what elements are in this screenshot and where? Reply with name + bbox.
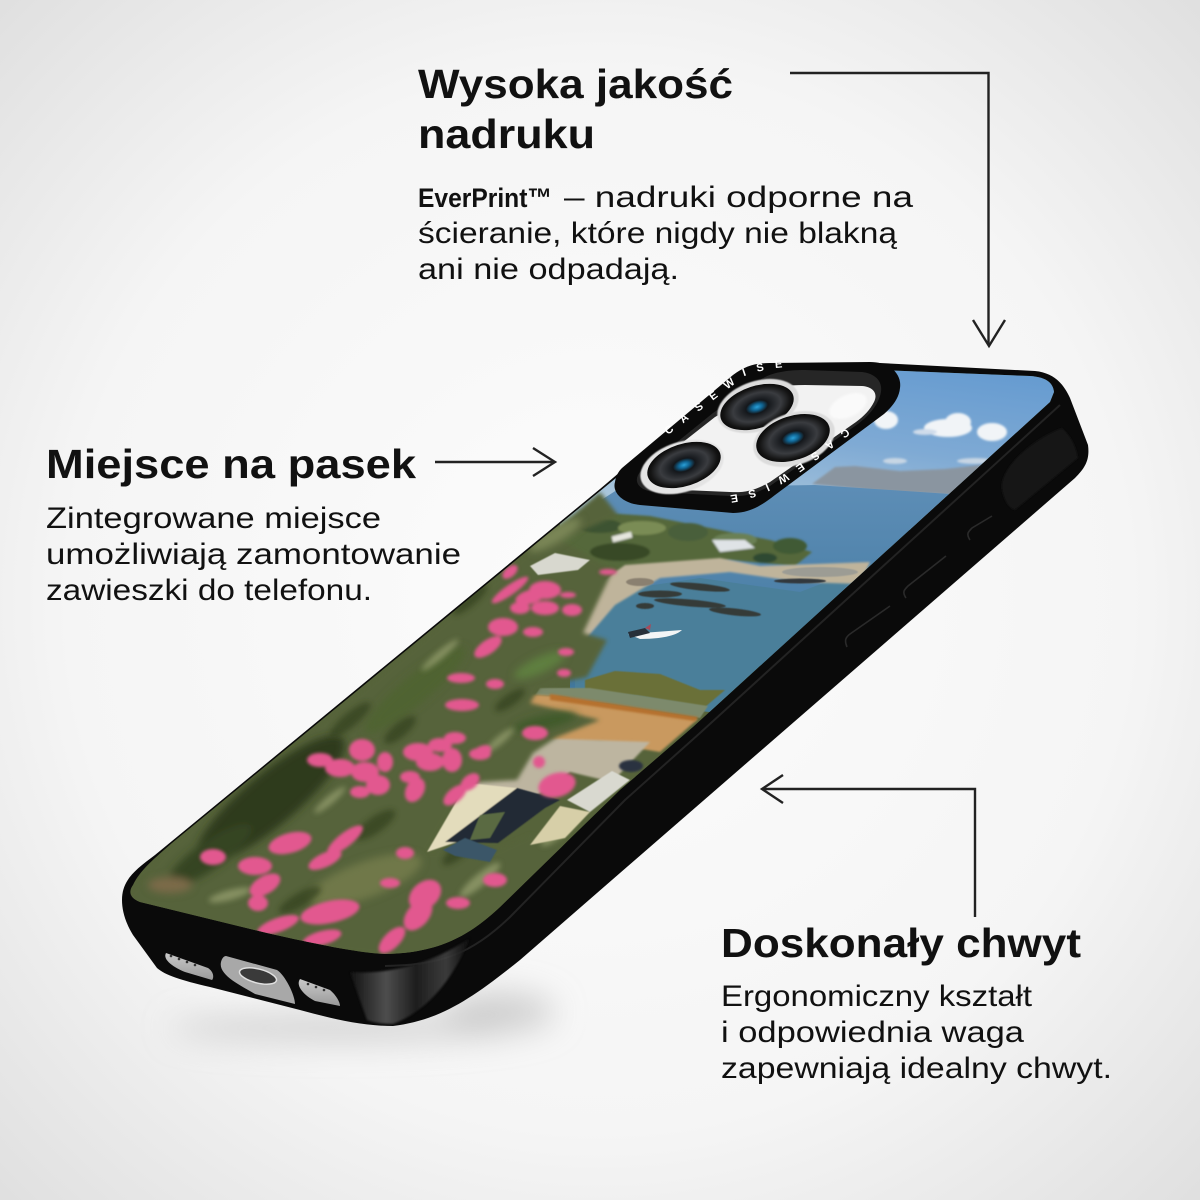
body text: zawieszki do telefonu. — [46, 574, 372, 607]
body text: Zintegrowane miejsce — [46, 502, 381, 535]
base — [120, 360, 1070, 970]
body text: ścieranie, które nigdy nie blakną — [418, 217, 897, 250]
body text — [721, 980, 1112, 1085]
body text: – nadruki odporne na — [564, 181, 913, 214]
charging port — [221, 956, 295, 1004]
white villa on left shore — [530, 553, 590, 575]
sky — [560, 370, 1054, 530]
body text: EverPrint™ — [418, 183, 552, 213]
green strip — [535, 688, 708, 718]
flash — [825, 388, 871, 424]
body text — [46, 502, 461, 607]
body text: zapewniają idealny chwyt. — [721, 1052, 1112, 1085]
bay water — [575, 565, 870, 712]
mountains — [812, 464, 990, 495]
brand text lower: CASEWISE — [730, 430, 849, 503]
photo print — [120, 350, 1080, 970]
body text — [418, 181, 913, 286]
camera bump — [614, 362, 900, 513]
body text: i odpowiednia waga — [721, 1016, 1024, 1049]
left speaker — [165, 953, 213, 980]
phone shadow — [170, 992, 555, 1042]
rocks — [626, 567, 858, 618]
phone case — [122, 363, 1088, 1026]
foliage — [120, 492, 625, 960]
callout: print quality — [418, 61, 913, 286]
right speaker — [299, 979, 340, 1006]
bump frame — [614, 362, 900, 513]
coast trees — [570, 512, 812, 578]
side bevel — [385, 405, 1060, 966]
heading: Doskonały chwyt — [721, 920, 1081, 966]
boat — [628, 624, 682, 639]
gravel path — [476, 738, 650, 794]
camera lens 1 — [710, 369, 806, 443]
body text: umożliwiają zamontowanie — [46, 538, 461, 571]
pavilion shadow — [619, 760, 643, 772]
pink oleander flowers — [200, 562, 617, 958]
camera lens 3 — [633, 430, 731, 504]
callout: grip — [721, 920, 1112, 1085]
heading: Wysoka jakość — [418, 61, 733, 107]
bottom gloss — [350, 938, 470, 1024]
arrow: print quality — [790, 73, 1005, 346]
sea — [570, 485, 949, 699]
shore shrubs — [585, 671, 725, 707]
heading — [418, 61, 733, 157]
strap slot — [1002, 428, 1078, 510]
body text: Ergonomiczny kształt — [721, 980, 1033, 1013]
clouds — [874, 411, 1007, 464]
callout: strap slot — [46, 441, 461, 607]
arrow: grip — [762, 775, 975, 917]
case body — [122, 363, 1088, 1026]
beach and jetty — [565, 558, 870, 640]
heading: nadruku — [418, 111, 595, 157]
side buttons — [846, 516, 992, 647]
arrow: strap slot — [435, 448, 555, 476]
building — [427, 771, 630, 862]
bump inner rim — [637, 370, 881, 496]
brand text upper: CASEWISE — [666, 362, 782, 434]
white phone body — [642, 385, 876, 492]
heading: Miejsce na pasek — [46, 441, 416, 487]
body text: ani nie odpadają. — [418, 253, 679, 286]
orange sand — [528, 694, 698, 754]
camera lens 2 — [746, 401, 842, 477]
